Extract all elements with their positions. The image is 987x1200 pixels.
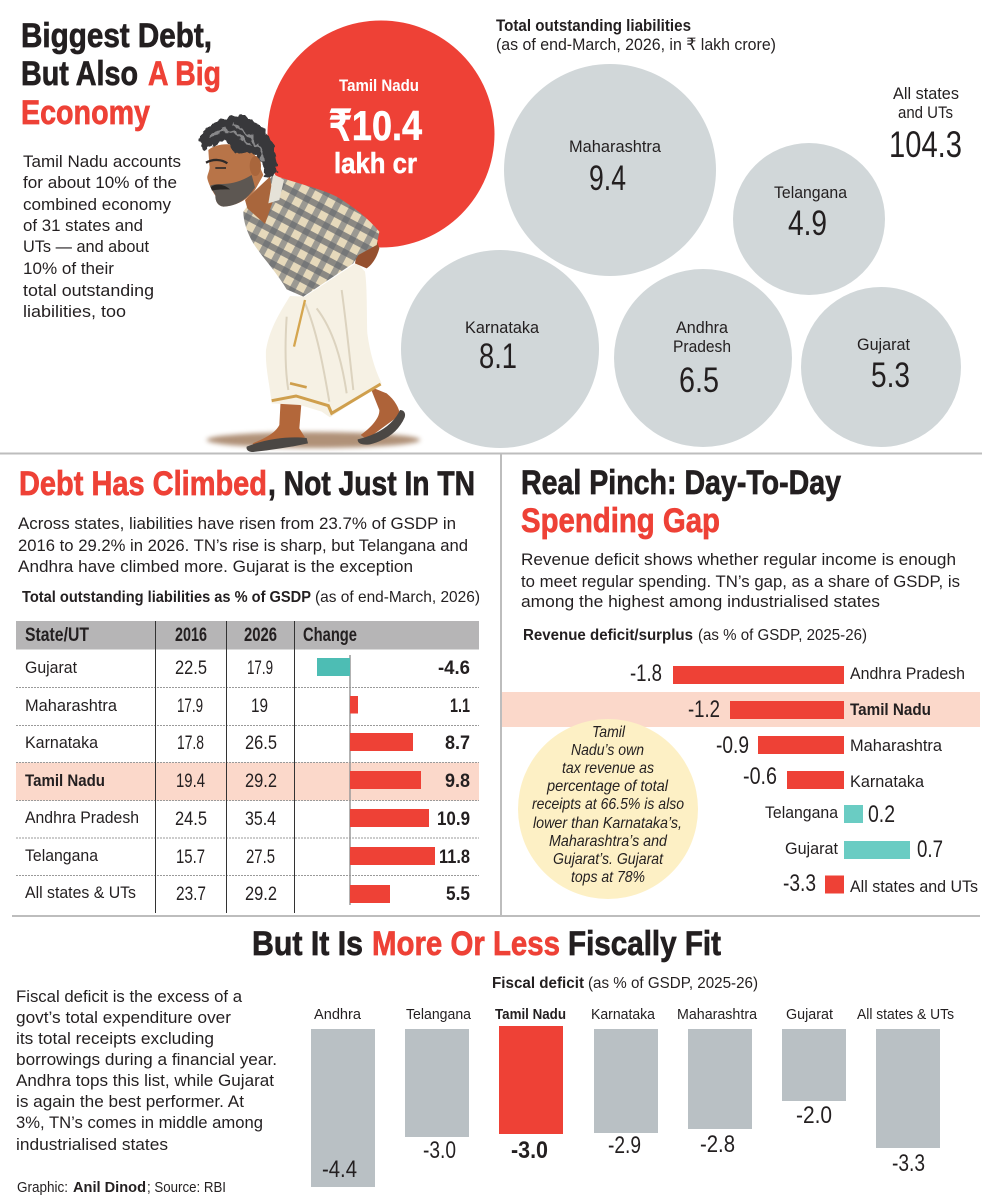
callout: all states and UTs 104.3: All states [893, 84, 959, 103]
text block: fiscal deficit explanation: industrialised states [16, 1135, 168, 1154]
text block: debt explanation: Andhra have climbed more. Gujarat is the exception [18, 557, 413, 576]
bubble: Andhra Pradesh 6.5 [614, 269, 792, 447]
text block: Tamil Nadu intro: of 31 states and [23, 216, 143, 235]
chart heading: total outstanding liabilities: (as of end-March, 2026, in ₹ lakh crore) [496, 35, 776, 54]
callout: own tax revenue: percentage of total [546, 778, 668, 795]
credit line: Anil Dinod [73, 1179, 146, 1196]
bubble: Telangana 4.9 [733, 143, 885, 295]
title: Biggest Debt, But Also A Big Economy: But Also [21, 55, 138, 93]
row: Telangana: 15.7 [176, 847, 205, 868]
chart heading: revenue deficit or surplus: Revenue deficit/surplus [523, 627, 693, 644]
heading: But It Is More Or Less Fiscally Fit: Fiscally Fit [568, 925, 721, 963]
title: Biggest Debt, But Also A Big Economy [21, 17, 221, 132]
chart heading: revenue deficit or surplus: (as % of GSDP, 2025-26) [698, 627, 867, 644]
text block: revenue deficit explanation: among the highest among industrialised states [521, 592, 880, 611]
table: liabilities as percent of GSDP [16, 621, 479, 913]
bar: Karnataka [591, 1006, 658, 1159]
bar: Tamil Nadu [688, 696, 931, 723]
bar: Maharashtra: Maharashtra [677, 1006, 758, 1023]
heading: But It Is More Or Less Fiscally Fit: More Or Less [372, 925, 560, 963]
bubble: Maharashtra 9.4 [504, 64, 716, 276]
callout: own tax revenue: tops at 78% [571, 869, 645, 886]
credit line: Graphic: [17, 1179, 68, 1196]
bar: Tamil Nadu: -1.2 [688, 696, 720, 723]
bar: Telangana: 0.2 [868, 801, 895, 828]
table header row: State/UT [25, 625, 89, 646]
bubble: Karnataka 8.1: 8.1 [479, 337, 517, 376]
text block: fiscal deficit explanation [16, 987, 277, 1154]
bubble: Tamil Nadu 10.4 lakh crore: Tamil Nadu [339, 76, 419, 95]
table header row: 2016 [175, 625, 207, 646]
text block: Tamil Nadu intro: for about 10% of the [23, 173, 177, 192]
bar: Telangana: -3.0 [423, 1137, 456, 1164]
bar chart: revenue deficit [502, 660, 980, 897]
bar: all states and UTs: -3.3 [892, 1150, 925, 1177]
bar: Tamil Nadu: Tamil Nadu [850, 700, 931, 719]
text block: Tamil Nadu intro: 10% of their [23, 259, 114, 278]
bubble: Telangana 4.9: Telangana [774, 183, 847, 202]
row: All states and UTs: 5.5 [446, 884, 470, 905]
row: Gujarat: -4.6 [438, 658, 470, 679]
text block: fiscal deficit explanation: its total receipts excluding [16, 1029, 214, 1048]
row: Telangana [25, 846, 470, 868]
text block: debt explanation: Across states, liabilities have risen from 23.7% of GSDP in [18, 514, 456, 533]
text block: Tamil Nadu intro [23, 152, 181, 321]
text block: fiscal deficit explanation: govt’s total expenditure over [16, 1008, 231, 1027]
bubble: Gujarat 5.3 [801, 287, 961, 447]
bubble: Andhra Pradesh 6.5: Pradesh [673, 337, 731, 356]
text block: fiscal deficit explanation: 3%, TN’s comes in middle among [16, 1113, 263, 1132]
bar: Karnataka: -0.6 [743, 763, 777, 790]
table heading: Total outstanding liabilities as % of GSDP [22, 589, 311, 606]
row: Andhra Pradesh: 35.4 [245, 809, 276, 830]
text block: fiscal deficit explanation: borrowings during a financial year. [16, 1050, 277, 1069]
bar: Telangana [405, 1006, 472, 1164]
table heading: (as of end-March, 2026) [315, 589, 480, 606]
bar: Karnataka: -2.9 [608, 1132, 641, 1159]
heading: Debt Has Climbed, Not Just In TN: Debt Has Climbed [19, 465, 267, 503]
callout: own tax revenue: lower than Karnataka’s, [533, 815, 682, 832]
heading: But It Is More Or Less Fiscally Fit: But It Is [252, 925, 363, 963]
row: Maharashtra [25, 696, 470, 717]
text block: debt explanation [18, 514, 468, 576]
row: Tamil Nadu [25, 771, 470, 792]
bar: Tamil Nadu: -3.0 [511, 1137, 548, 1164]
bar: Tamil Nadu: Tamil Nadu [495, 1006, 566, 1023]
row: All states and UTs: 23.7 [176, 884, 206, 905]
callout: own tax revenue: receipts at 66.5% is also [532, 796, 684, 813]
bar: Karnataka: Karnataka [591, 1006, 656, 1023]
bar: Karnataka: Karnataka [850, 772, 925, 791]
bar: all states and UTs: -3.3 [783, 870, 816, 897]
title: Biggest Debt, But Also A Big Economy: Biggest Debt, [21, 17, 212, 55]
row: Maharashtra: 17.9 [177, 696, 203, 717]
bar: all states and UTs: All states & UTs [857, 1006, 954, 1023]
bar: all states and UTs [857, 1006, 954, 1177]
heading: Real Pinch: Day-To-Day Spending Gap: Spending Gap [521, 502, 720, 540]
row: Telangana: 11.8 [439, 847, 470, 868]
text block: fiscal deficit explanation: Fiscal deficit is the excess of a [16, 987, 243, 1006]
row: Tamil Nadu: Tamil Nadu [25, 771, 105, 790]
heading: Real Pinch: Day-To-Day Spending Gap: Real Pinch: Day-To-Day [521, 464, 841, 502]
chart heading: fiscal deficit: (as % of GSDP, 2025-26) [588, 975, 758, 992]
bar: Gujarat: Gujarat [785, 839, 838, 858]
bar: all states and UTs [783, 870, 978, 897]
row: Andhra Pradesh: 24.5 [175, 809, 207, 830]
text block: Tamil Nadu intro: Tamil Nadu accounts [23, 152, 181, 171]
chart heading: total outstanding liabilities: Total outstanding liabilities [496, 16, 691, 35]
heading: But It Is More Or Less Fiscally Fit [252, 925, 721, 963]
bar: Andhra Pradesh [630, 660, 965, 687]
row: Andhra Pradesh: Andhra Pradesh [25, 808, 139, 827]
table header row [25, 625, 357, 646]
bar: Maharashtra [677, 1006, 758, 1158]
row: Karnataka: 26.5 [245, 733, 277, 754]
table heading [22, 589, 480, 606]
chart heading: total outstanding liabilities [496, 16, 776, 54]
row: All states and UTs: All states & UTs [25, 883, 136, 902]
bar: Andhra: Andhra [314, 1006, 362, 1023]
heading: Real Pinch: Day-To-Day Spending Gap [521, 464, 841, 540]
heading: Debt Has Climbed, Not Just In TN: , Not Just In TN [268, 465, 475, 503]
row: Tamil Nadu: 29.2 [245, 771, 277, 792]
callout: own tax revenue: Gujarat’s. Gujarat [553, 851, 663, 868]
bar: Karnataka [743, 763, 925, 791]
callout: own tax revenue: Nadu’s own [571, 742, 644, 759]
chart heading: fiscal deficit [492, 975, 758, 992]
row: Tamil Nadu: 9.8 [445, 771, 470, 792]
bar chart: fiscal deficit [311, 1006, 954, 1187]
callout: all states and UTs 104.3: 104.3 [889, 124, 962, 165]
bubble: Maharashtra 9.4: Maharashtra [569, 137, 662, 156]
row: Gujarat [25, 658, 470, 679]
row: Andhra Pradesh [25, 808, 470, 830]
text block: revenue deficit explanation: to meet regular spending. TN’s gap, as a share of GSDP, is [521, 572, 960, 591]
callout: own tax revenue: Maharashtra’s and [549, 833, 668, 850]
row: Tamil Nadu: 19.4 [176, 771, 205, 792]
bar: Tamil Nadu [495, 1006, 566, 1164]
bubble: Gujarat 5.3: 5.3 [871, 356, 910, 395]
text block: Tamil Nadu intro: combined economy [23, 195, 171, 214]
bar: Gujarat: Gujarat [786, 1006, 834, 1023]
illustration: bent man in checked shirt and dhoti [199, 116, 420, 452]
text block: revenue deficit explanation: Revenue deficit shows whether regular income is enough [521, 550, 956, 569]
callout: own tax revenue [518, 719, 698, 899]
bubble: Gujarat 5.3: Gujarat [857, 335, 910, 354]
row: Maharashtra: 19 [251, 696, 268, 717]
chart heading: fiscal deficit: Fiscal deficit [492, 975, 585, 992]
bar: Telangana: Telangana [406, 1006, 472, 1023]
bubble: Andhra Pradesh 6.5: 6.5 [679, 361, 719, 400]
row: Gujarat: 17.9 [247, 658, 273, 679]
bar: Gujarat [785, 836, 943, 863]
callout: all states and UTs 104.3 [889, 84, 962, 165]
title: Biggest Debt, But Also A Big Economy: A Big [148, 55, 221, 93]
bubble: Karnataka 8.1 [401, 250, 599, 448]
row: All states and UTs [25, 883, 470, 905]
bubble: Maharashtra 9.4: 9.4 [589, 159, 626, 198]
bar: Maharashtra: -2.8 [700, 1131, 735, 1158]
heading: Debt Has Climbed, Not Just In TN [19, 465, 475, 503]
row: All states and UTs: 29.2 [245, 884, 277, 905]
text block: revenue deficit explanation [521, 550, 960, 611]
bar: Telangana [765, 801, 895, 828]
bubble: Karnataka 8.1: Karnataka [465, 318, 540, 337]
bar: Andhra Pradesh: Andhra Pradesh [850, 664, 965, 683]
bar: Gujarat: 0.7 [917, 836, 943, 863]
text block: debt explanation: 2016 to 29.2% in 2026. TN’s rise is sharp, but Telangana and [18, 536, 468, 555]
table header row: 2026 [244, 625, 277, 646]
callout: own tax revenue: Tamil [592, 724, 625, 741]
panel: real pinch, spending gap [502, 464, 980, 899]
text block: fiscal deficit explanation: is again the best performer. At [16, 1092, 244, 1111]
table header row: Change [303, 625, 357, 646]
row: Andhra Pradesh: 10.9 [437, 809, 470, 830]
panel: fiscally fit [16, 925, 954, 1196]
title: Biggest Debt, But Also A Big Economy: Economy [21, 94, 150, 132]
row: Telangana: 27.5 [246, 847, 275, 868]
bar: Maharashtra [716, 732, 943, 759]
panel: top section, biggest debt [21, 16, 962, 452]
text block: fiscal deficit explanation: Andhra tops this list, while Gujarat [16, 1071, 274, 1090]
bar: Maharashtra: -0.9 [716, 732, 749, 759]
row: Karnataka: 17.8 [177, 733, 204, 754]
bar: Andhra [311, 1006, 375, 1187]
panel: debt has climbed [16, 465, 480, 913]
credit line [17, 1179, 226, 1196]
row: Maharashtra: Maharashtra [25, 696, 118, 715]
bar: Andhra Pradesh: -1.8 [630, 660, 662, 687]
row: Gujarat: Gujarat [25, 658, 77, 677]
row: Gujarat: 22.5 [175, 658, 207, 679]
bar: all states and UTs: All states and UTs [850, 877, 978, 896]
bubble: Tamil Nadu 10.4 lakh crore: ₹10.4 [329, 102, 423, 149]
bar: Gujarat [782, 1006, 846, 1129]
callout: all states and UTs 104.3: and UTs [898, 103, 953, 122]
bubble: Tamil Nadu 10.4 lakh crore [268, 20, 494, 248]
bar: Andhra: -4.4 [322, 1156, 357, 1183]
row: Karnataka: Karnataka [25, 733, 99, 752]
chart heading: revenue deficit or surplus [523, 627, 867, 644]
row: Karnataka: 8.7 [445, 733, 470, 754]
bubble: Telangana 4.9: 4.9 [788, 204, 827, 243]
bar: Telangana: Telangana [765, 803, 838, 822]
bubble: Andhra Pradesh 6.5: Andhra [676, 318, 729, 337]
bubble: Tamil Nadu 10.4 lakh crore: lakh cr [334, 148, 417, 180]
bar: Maharashtra: Maharashtra [850, 736, 943, 755]
callout: own tax revenue: tax revenue as [562, 760, 654, 777]
row: Karnataka [25, 733, 470, 754]
text block: Tamil Nadu intro: total outstanding [23, 281, 154, 300]
row: Telangana: Telangana [25, 846, 98, 865]
row: Maharashtra: 1.1 [450, 696, 470, 717]
bar: Gujarat: -2.0 [796, 1102, 832, 1129]
credit line: ; Source: RBI [147, 1179, 226, 1196]
text block: Tamil Nadu intro: liabilities, too [23, 302, 126, 321]
text block: Tamil Nadu intro: UTs — and about [23, 237, 149, 256]
